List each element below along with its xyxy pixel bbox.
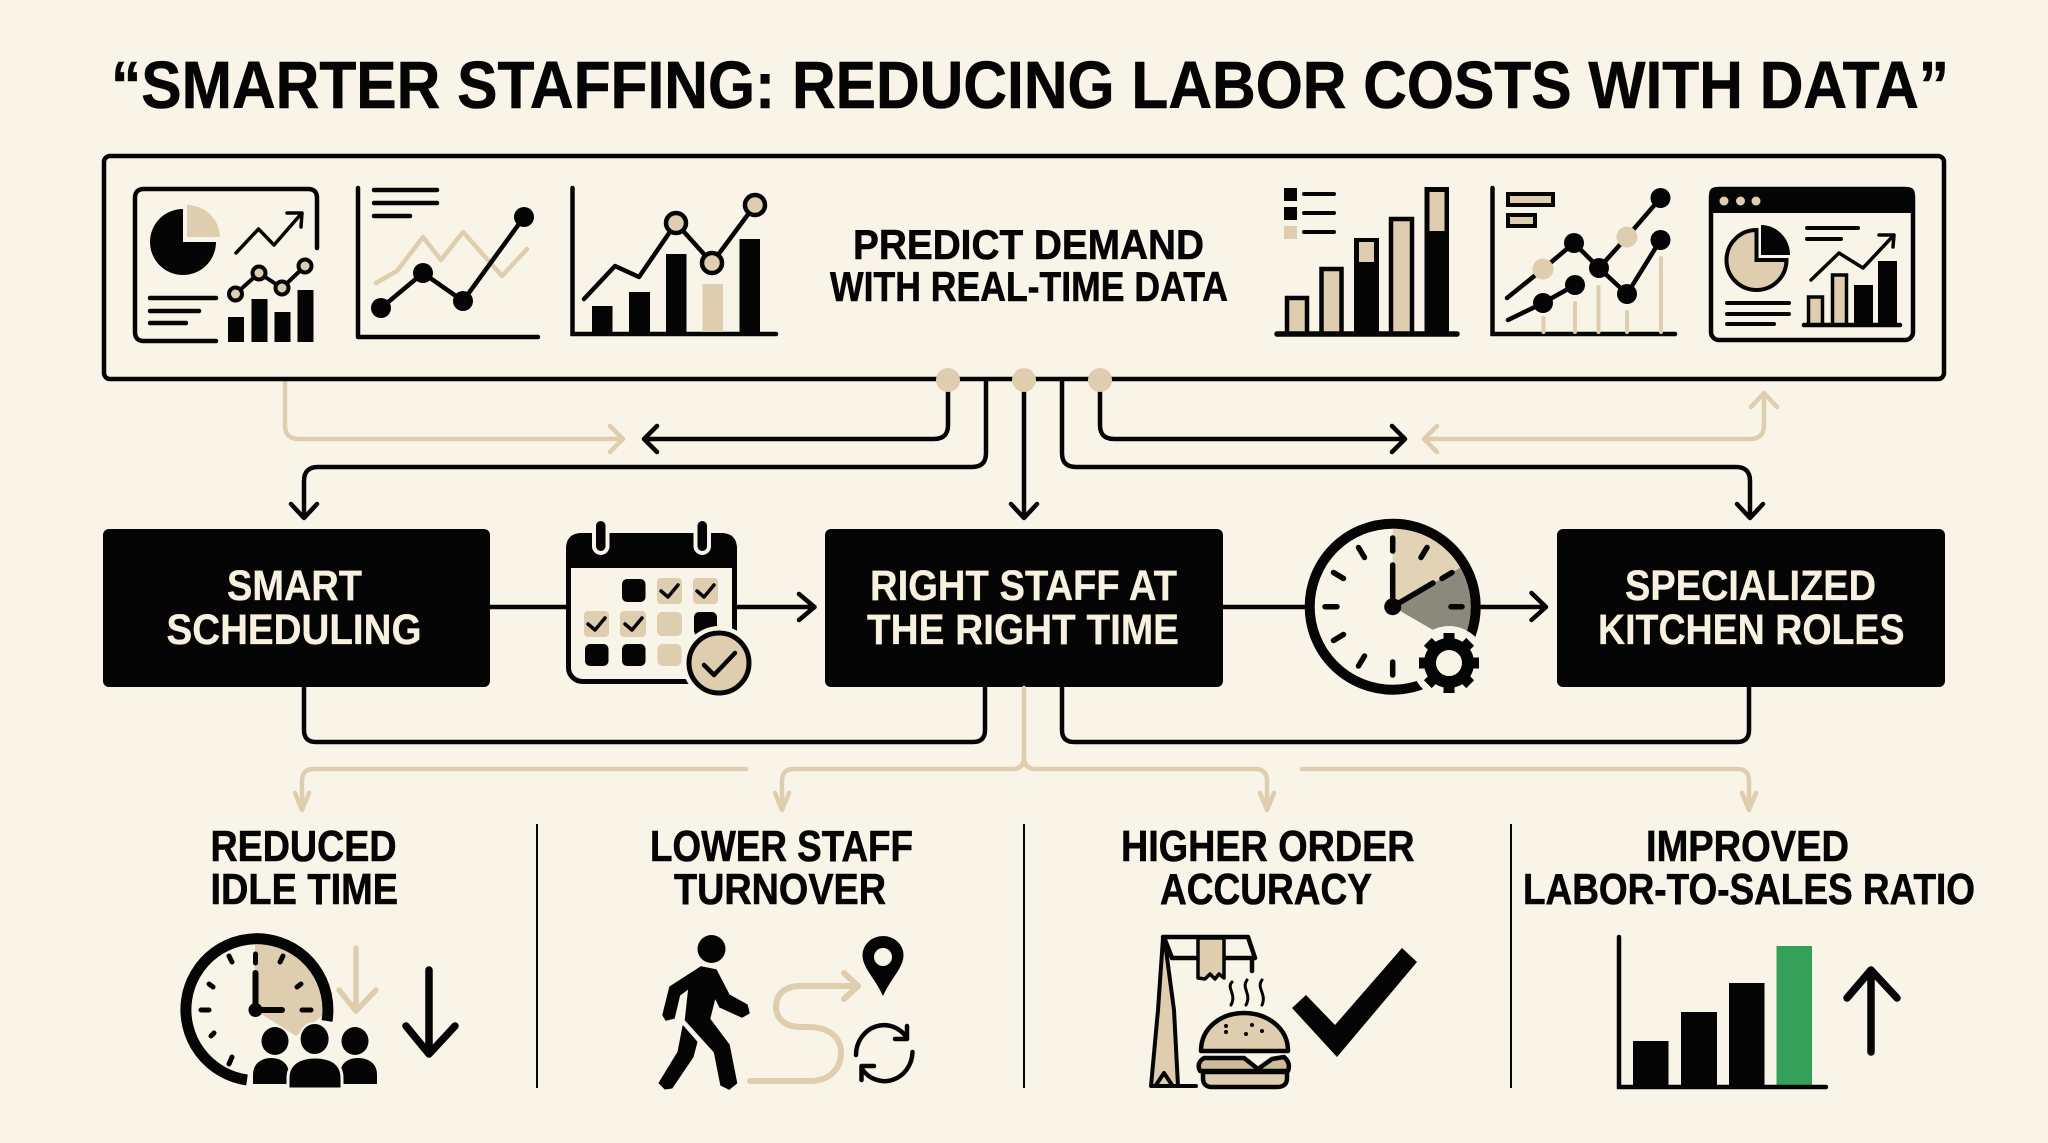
box: specialized kitchen roles: KITCHEN ROLES	[1598, 606, 1904, 654]
outcome heading	[1121, 823, 1414, 914]
outcome heading: IMPROVED	[1646, 823, 1849, 871]
outcome: improved labor-to-sales ratio	[1523, 823, 1975, 1087]
connector dots on panel edge	[936, 368, 1112, 392]
outcome heading: LOWER STAFF	[650, 823, 913, 871]
icon: browser dashboard	[1709, 187, 1915, 340]
outcome heading: REDUCED	[210, 823, 396, 871]
box: smart scheduling: SCHEDULING	[166, 606, 422, 654]
box: smart scheduling: SMART	[227, 562, 362, 610]
box: specialized kitchen roles: SPECIALIZED	[1625, 562, 1876, 610]
outcome heading	[650, 823, 913, 914]
panel: predict demand	[104, 156, 1944, 379]
icon: clock with team and down arrows	[186, 939, 455, 1089]
column dividers	[537, 824, 1511, 1088]
connectors: process row horizontal links	[490, 593, 1546, 620]
outcome heading: ACCURACY	[1160, 866, 1372, 914]
outcome heading	[1523, 823, 1975, 914]
box: right staff at the right time: THE RIGHT TIME	[867, 606, 1179, 654]
outcome heading: IDLE TIME	[210, 866, 398, 914]
panel caption	[830, 221, 1228, 310]
icon: calendar with check badge	[566, 519, 756, 700]
icon: bar chart with green bar and up arrow	[1619, 937, 1897, 1087]
icon: line chart	[358, 188, 538, 337]
icon: stacked bar chart with legend	[1277, 187, 1457, 334]
panel caption: WITH REAL-TIME DATA	[830, 263, 1228, 310]
box: smart scheduling	[103, 529, 490, 687]
icon: clock with gear	[1310, 524, 1486, 700]
outcome heading: HIGHER ORDER	[1121, 823, 1414, 871]
outcome: reduced idle time	[186, 823, 455, 1089]
box: specialized kitchen roles	[1557, 529, 1945, 687]
box: right staff at the right time: RIGHT STAFF AT	[870, 562, 1177, 610]
outcome heading	[210, 823, 398, 914]
outcome: lower staff turnover	[650, 823, 913, 1089]
outcome heading: TURNOVER	[674, 866, 886, 914]
icon: combo bar and line chart	[572, 188, 776, 334]
icon: takeout bag, burger and check	[1151, 937, 1417, 1087]
icon: multi-line chart	[1492, 188, 1675, 334]
icon: dashboard with pie and charts	[135, 189, 317, 342]
panel caption: PREDICT DEMAND	[853, 221, 1204, 268]
box: right staff at the right time	[825, 529, 1223, 687]
connectors: process row to outcomes	[295, 687, 1756, 810]
connectors: top panel to process row	[285, 381, 1777, 518]
outcome: higher order accuracy	[1121, 823, 1417, 1087]
icon: walking person with path, pin and refresh	[659, 935, 912, 1089]
outcome heading: LABOR-TO-SALES RATIO	[1523, 866, 1975, 914]
